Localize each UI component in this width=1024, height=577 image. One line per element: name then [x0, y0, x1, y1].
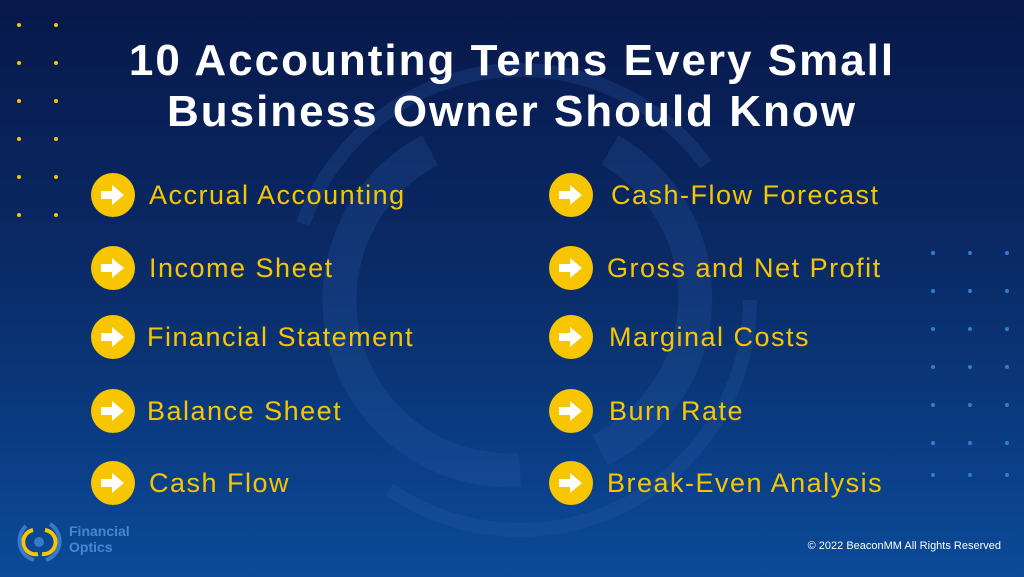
item: Gross and Net Profit — [549, 246, 882, 290]
item: Break-Even Analysis: Break-Even Analysis — [607, 468, 883, 498]
item: Financial Statement — [91, 315, 414, 359]
item: Income Sheet: Income Sheet — [149, 252, 334, 282]
logo: Financial Optics: Financial — [69, 523, 130, 539]
item: Gross and Net Profit: Gross and Net Profit — [607, 252, 882, 282]
logo: Financial Optics — [18, 522, 130, 562]
item: Balance Sheet: Balance Sheet — [147, 396, 342, 426]
title — [129, 36, 895, 136]
item: Break-Even Analysis — [549, 461, 883, 505]
item: Burn Rate: Burn Rate — [609, 396, 744, 426]
copyright: © 2022 BeaconMM All Rights Reserved — [808, 540, 1001, 552]
decorative dots — [17, 23, 58, 217]
item: Burn Rate — [549, 389, 744, 433]
item: Accrual Accounting: Accrual Accounting — [149, 180, 406, 210]
item: Marginal Costs: Marginal Costs — [609, 322, 810, 352]
title: Business Owner Should Know — [167, 87, 857, 136]
item: Accrual Accounting — [91, 173, 406, 217]
item: Financial Statement: Financial Statement — [147, 322, 414, 352]
item: Cash-Flow Forecast — [549, 173, 880, 217]
item: Marginal Costs — [549, 315, 810, 359]
logo: Financial Optics: Optics — [69, 539, 113, 555]
item: Cash-Flow Forecast: Cash-Flow Forecast — [611, 180, 880, 210]
item: Cash Flow — [91, 461, 290, 505]
title: 10 Accounting Terms Every Small — [129, 36, 895, 85]
item: Cash Flow: Cash Flow — [149, 468, 290, 498]
item: Income Sheet — [91, 246, 334, 290]
item: Balance Sheet — [91, 389, 342, 433]
